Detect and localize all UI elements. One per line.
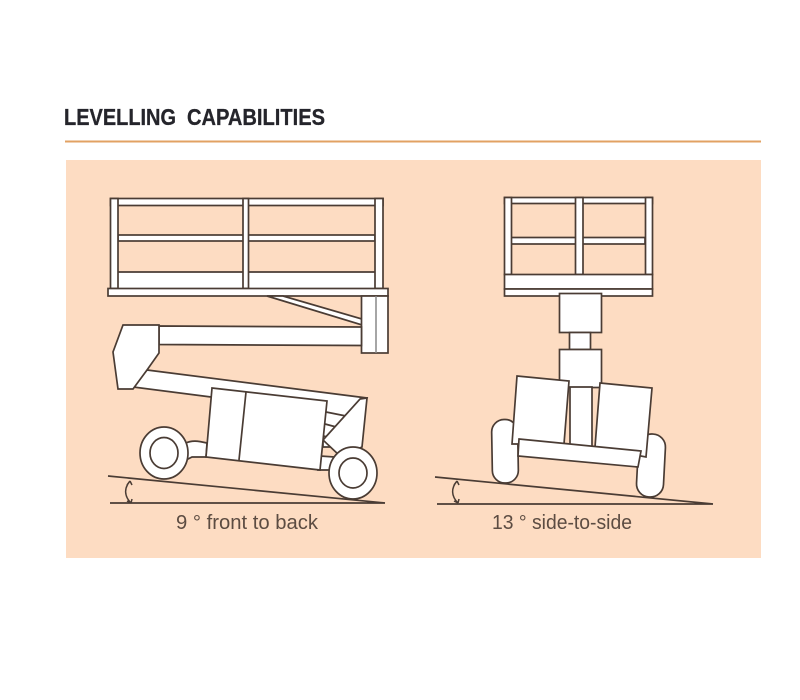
lower boom xyxy=(133,370,367,447)
right wheel xyxy=(636,433,666,498)
panel: levelling diagrams xyxy=(66,160,761,558)
title: CAPABILITIES xyxy=(187,104,325,130)
title: LEVELLING xyxy=(64,104,176,130)
platform railing xyxy=(504,198,652,296)
platform railing xyxy=(108,198,388,296)
caption: side to side: 13 ° side-to-side xyxy=(492,512,632,534)
mast neck xyxy=(570,332,590,350)
rear wheel xyxy=(329,447,377,499)
diagram: front to back levelling xyxy=(108,198,388,503)
axle xyxy=(518,439,641,467)
title xyxy=(64,104,325,130)
right counterweight xyxy=(595,383,652,457)
rear mast xyxy=(323,398,367,456)
caption: front to back: 9 ° front to back xyxy=(176,512,319,534)
title rule xyxy=(65,140,761,142)
chassis xyxy=(206,388,327,470)
rear axle link xyxy=(318,456,335,470)
lower mast block xyxy=(560,350,602,388)
front axle link xyxy=(186,441,207,460)
diagram: side to side levelling xyxy=(435,198,713,504)
column xyxy=(570,387,592,448)
left wheel xyxy=(491,419,519,483)
front wheel xyxy=(140,427,188,479)
cross bars xyxy=(324,412,346,439)
ramp xyxy=(435,477,713,504)
boom head xyxy=(113,325,159,389)
angle arc xyxy=(453,481,459,503)
upper mast block xyxy=(560,294,602,332)
angle arc xyxy=(126,481,132,503)
upper boom xyxy=(159,326,362,346)
ramp xyxy=(108,476,385,503)
left counterweight xyxy=(512,376,569,444)
boom support bracket xyxy=(267,296,388,353)
